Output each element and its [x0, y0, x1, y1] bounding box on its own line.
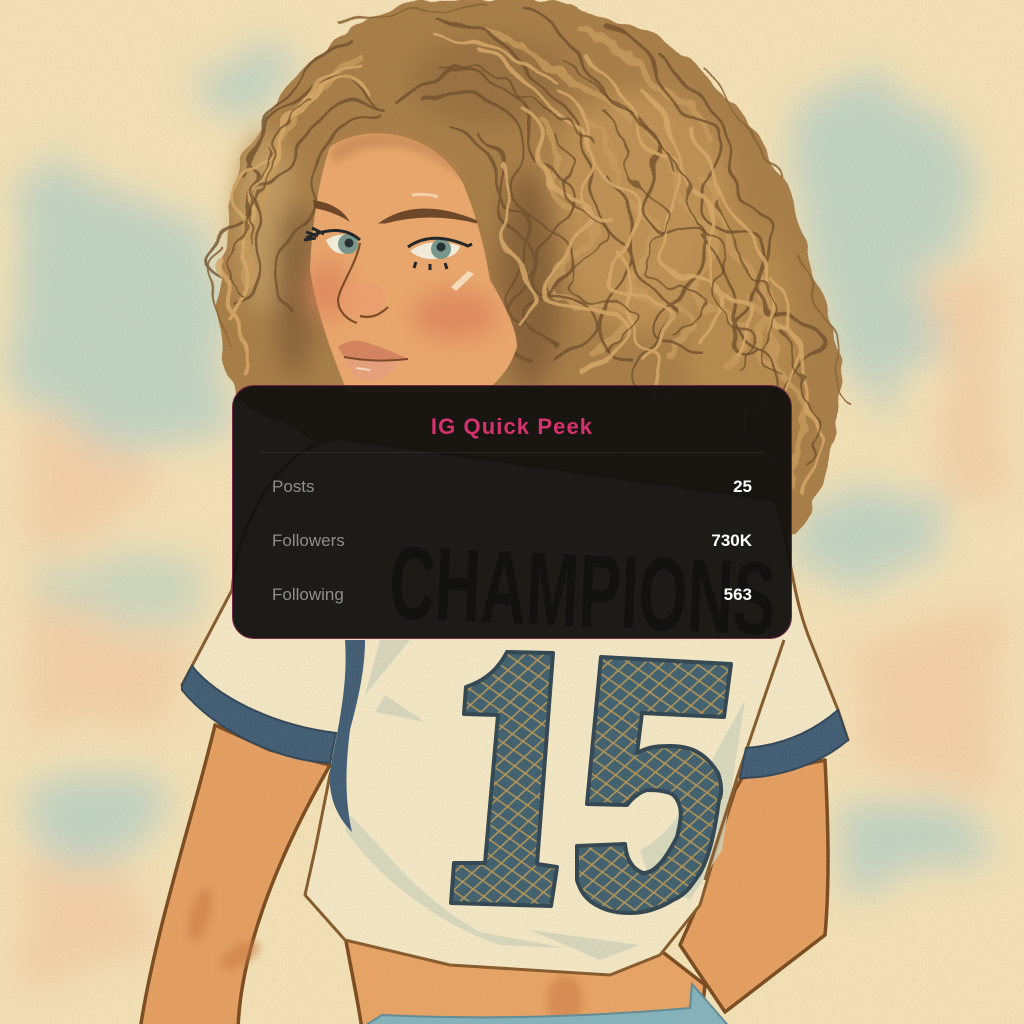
- card divider: [260, 452, 764, 453]
- shorts: [358, 984, 732, 1024]
- number 5: [577, 657, 731, 913]
- value: following: 563: [724, 585, 752, 604]
- cheek highlight: [451, 271, 474, 291]
- left sleeve band: [182, 666, 336, 763]
- arms: [140, 725, 828, 1024]
- navy stripe: [330, 640, 365, 832]
- jersey folds: [345, 640, 745, 960]
- hairline shadow: [330, 132, 470, 180]
- hair: thick golden ringlets: [245, 30, 804, 485]
- right eyebrow: [383, 210, 477, 222]
- CHAMPIONS print: CHAMPIONS: [387, 525, 778, 658]
- hair: curl strands: [212, 5, 850, 490]
- forehead highlight: [412, 194, 438, 197]
- nose: [338, 243, 388, 323]
- body side seam: [705, 640, 784, 880]
- lips: [338, 341, 408, 382]
- number 1: [451, 652, 557, 906]
- left eye: [304, 228, 360, 254]
- hair: fine dark curl strands: [232, 60, 820, 460]
- hair: back mass: [219, 0, 841, 600]
- face: [304, 132, 517, 392]
- jersey: [182, 439, 848, 975]
- arm shading: [183, 885, 583, 1024]
- value: posts: 25: [733, 477, 752, 496]
- value: followers: 730K: [711, 531, 752, 550]
- card title: IG Quick Peek: [431, 414, 593, 439]
- card: IG Quick Peek: [232, 385, 792, 639]
- label: posts: Posts: [272, 477, 315, 496]
- right eye: [408, 238, 472, 270]
- label: followers: Followers: [272, 531, 345, 550]
- label: following: Following: [272, 585, 344, 604]
- right sleeve band: [740, 710, 848, 778]
- left eyebrow: [313, 200, 350, 222]
- blush: [307, 260, 497, 339]
